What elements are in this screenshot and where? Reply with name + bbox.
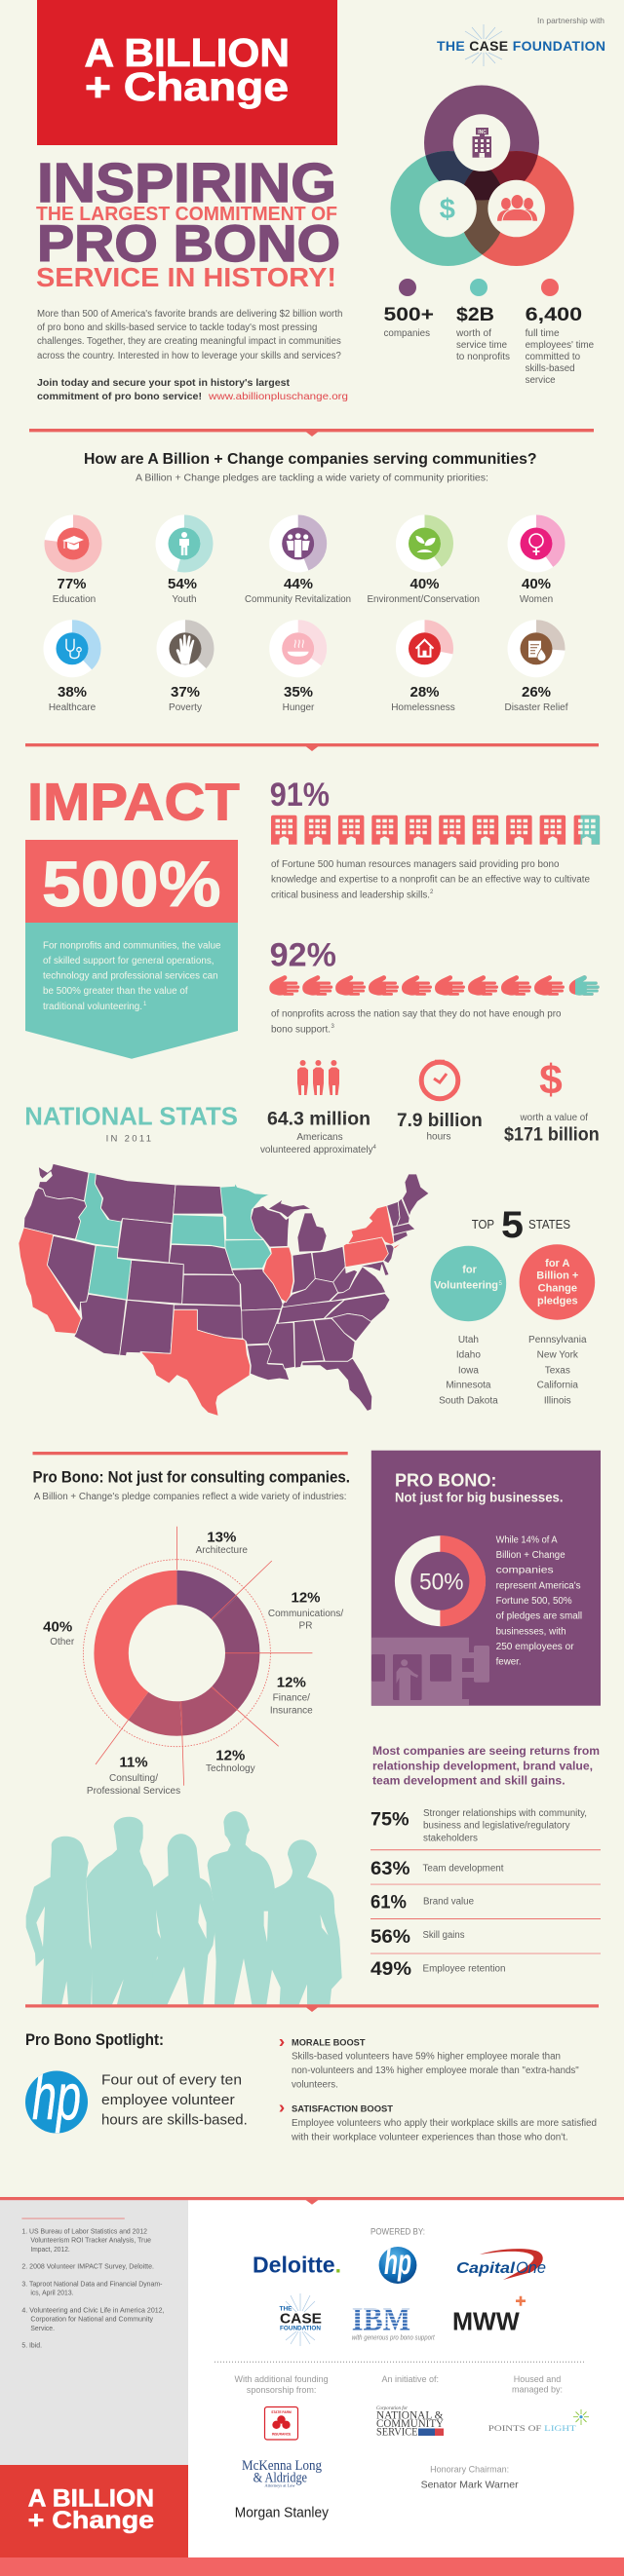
- label: Finance/Insurance 12%: Finance/: [273, 1693, 310, 1704]
- logo: footer A Billion + Change: + Change: [28, 2507, 154, 2534]
- text: morale boost: non-volunteers and 13% higher employee morale than "extra-hands": [292, 2065, 579, 2076]
- priority: Homelessness 28%: 28%: [410, 684, 440, 701]
- label: founding sponsorship: With additional founding: [235, 2374, 329, 2384]
- logo: State Farm: STATE FARM: [271, 2410, 292, 2414]
- logo: MWW: [452, 2296, 526, 2336]
- stat: 64.3 million Americans: [260, 1060, 376, 1155]
- priority: Disaster Relief 26%: 26%: [522, 684, 551, 701]
- stat: 92% of nonprofits: 3: [332, 1024, 335, 1030]
- stat: 6,400 full time employees: employees' time: [526, 340, 595, 351]
- logo: Corporation for National and Community Service: COMMUNITY: [376, 2418, 445, 2430]
- intro paragraph: of pro bono and skills-based service to tackle today's most pressing: [37, 322, 317, 333]
- logo: footer A Billion + Change: A BILLION: [28, 2485, 154, 2513]
- footnotes: ics, April 2013.: [30, 2289, 73, 2297]
- text: HP spotlight: Four out of every ten: [101, 2072, 242, 2088]
- text: small business stat: While 14% of A: [496, 1534, 558, 1545]
- heading: Pro Bono Spotlight: Pro Bono Spotlight:: [25, 2031, 164, 2049]
- text: honorary chairman: [421, 2464, 519, 2491]
- text: morale boost: [279, 2038, 579, 2090]
- text: small business stat: 250 employees or: [496, 1642, 574, 1652]
- logo: HP sphere: [378, 2247, 417, 2284]
- logo: Points of Light: [488, 2409, 589, 2433]
- top states: for volunteering: Idaho: [456, 1350, 481, 1361]
- heading: Top 5 states: [472, 1204, 570, 1246]
- pictogram: ten buildings: [271, 815, 600, 845]
- stat: 6,400 full time employees: full time: [526, 328, 560, 339]
- footnotes: 5. Ibid.: [21, 2341, 42, 2350]
- priority: Disaster Relief 26%: Disaster Relief: [504, 702, 568, 713]
- intro paragraph: across the country. Interested in how to leverage your skills and services?: [37, 351, 341, 361]
- heading: not just for consulting companies: A Billion + Change's pledge companies reflect a wide variety of industries:: [34, 1492, 346, 1502]
- logo: State Farm: INSURANCE: [272, 2432, 292, 2436]
- heading: Impact: IMPACT: [27, 774, 240, 832]
- intro paragraph: [37, 309, 342, 361]
- label: Architecture 13%: 13%: [207, 1530, 236, 1546]
- stat: $2B worth of service time: $2B: [456, 304, 494, 325]
- chart: 50% donut: [395, 1535, 486, 1626]
- stat: 7.9 billion hours: 7.9 billion: [397, 1110, 483, 1131]
- stat: 91% of HR managers: 2: [430, 890, 434, 895]
- label: Other 40%: [43, 1619, 75, 1648]
- logo: Points of Light: POINTS OF LIGHT: [488, 2423, 577, 2433]
- label: housed and managed by: Housed and: [514, 2374, 561, 2384]
- stat: 92% of nonprofits: 92%: [270, 937, 336, 974]
- top states: for volunteering: Volunteering: [434, 1280, 498, 1292]
- priority: Homelessness 28%: Homelessness: [391, 702, 455, 713]
- label: Finance/Insurance 12%: [270, 1674, 313, 1717]
- priority: Women 40%: Women: [520, 594, 553, 605]
- priority: Community Revitalization 44%: [245, 514, 351, 605]
- logo: IBM: [349, 2302, 436, 2342]
- stat: 75%: Stronger relationships with community,: [423, 1808, 587, 1819]
- priority: Environment/Conservation 40%: Environment/Conservation: [367, 594, 480, 605]
- top states: for pledges: for A: [545, 1258, 569, 1269]
- logo: McKenna Long & Aldridge: Attorneys at Law: [264, 2482, 295, 2487]
- heading: Top 5 states: 5: [501, 1204, 524, 1246]
- logo: A Billion + Change: A BILLION: [84, 30, 290, 75]
- logo: Capital One: [456, 2249, 546, 2280]
- logo: Capital One: Capital: [456, 2260, 516, 2277]
- heading: community priorities: How are A Billion + Change companies serving communities?: [84, 451, 537, 468]
- title: Inspiring the largest commitment of pro bono service in history: PRO BONO: [37, 215, 340, 273]
- label: founding sponsorship: sponsorship from:: [247, 2385, 316, 2395]
- text: honorary chairman: Honorary Chairman:: [430, 2464, 509, 2474]
- icon: storefront: [371, 1638, 489, 1706]
- text: small business stat: [496, 1534, 582, 1668]
- priority: Poverty 37%: 37%: [171, 684, 200, 701]
- stat: 75%: stakeholders: [423, 1833, 478, 1843]
- title: Inspiring the largest commitment of pro bono service in history: SERVICE IN HISTORY!: [36, 262, 336, 292]
- priority: Hunger 35%: 35%: [284, 684, 313, 701]
- priority: Education 77%: Education: [53, 594, 96, 605]
- top states: for pledges: Change: [538, 1283, 577, 1295]
- title: Inspiring the largest commitment of pro bono service in history: [36, 152, 340, 292]
- label: Architecture 13%: [196, 1530, 248, 1556]
- stat: 61%: Brand value: [423, 1897, 474, 1908]
- heading: returns: Most companies are seeing returns from: [372, 1746, 600, 1758]
- stat: 500+ companies: 500+: [384, 304, 434, 325]
- text: morale boost: volunteers.: [292, 2079, 338, 2090]
- pictogram: ten hands: [269, 975, 600, 996]
- label: Consulting/Professional Services 11%: Consulting/: [109, 1773, 158, 1784]
- stat: 75%: 75%: [370, 1809, 410, 1830]
- top states: for pledges: pledges: [537, 1296, 578, 1307]
- stat: 92% of nonprofits: [269, 937, 600, 1035]
- heading: not just for consulting companies: [33, 1468, 350, 1502]
- text: small business stat: Billion + Change: [496, 1550, 566, 1561]
- text: small business stat: Fortune 500, 50%: [496, 1596, 572, 1607]
- stat: $2B worth of service time: service time: [456, 340, 507, 351]
- top states: for pledges: California: [537, 1381, 578, 1391]
- stat: $2B worth of service time: to nonprofits: [456, 352, 510, 362]
- stat: 63%: Team development: [423, 1864, 504, 1875]
- top states: for pledges: Billion +: [536, 1270, 578, 1282]
- list: company returns: [370, 1808, 601, 1980]
- partner: The Case Foundation: THE CASE FOUNDATION: [437, 38, 605, 54]
- panel: 500% banner: traditional volunteering.: [43, 1002, 142, 1012]
- stat: 91% of HR managers: of Fortune 500 human resources managers said providing pro bono: [271, 859, 560, 870]
- footnotes: [21, 2218, 165, 2350]
- text: small business stat: companies: [496, 1566, 554, 1576]
- stat: 75%: business and legislative/regulatory: [423, 1821, 570, 1832]
- priority: Community Revitalization 44%: 44%: [284, 576, 313, 592]
- label: Finance/Insurance 12%: 12%: [277, 1674, 306, 1690]
- label: Finance/Insurance 12%: Insurance: [270, 1706, 313, 1717]
- footnotes: 4. Volunteering and Civic Life in America 2012,: [21, 2305, 165, 2314]
- logo: HP: [25, 2071, 88, 2134]
- call to action: [37, 378, 348, 402]
- footnotes: 2. 2008 Volunteer IMPACT Survey, Deloitte.: [21, 2262, 154, 2271]
- top states: for pledges: Texas: [545, 1365, 570, 1376]
- panel: 500% banner: For nonprofits and communities, the value: [43, 940, 221, 951]
- footnotes: 1. US Bureau of Labor Statistics and 2012: [21, 2226, 147, 2235]
- icon: company building: INC: [478, 130, 487, 135]
- top states: for volunteering: 5: [499, 1281, 503, 1287]
- heading: not just for consulting companies: Pro Bono: Not just for consulting companies.: [33, 1468, 350, 1486]
- text: satisfaction boost: SATISFACTION BOOST: [292, 2104, 393, 2115]
- stat: 64.3 million Americans: Americans: [296, 1132, 343, 1143]
- logo: McKenna Long & Aldridge: & Aldridge: [254, 2470, 307, 2485]
- priority: Hunger 35%: Hunger: [283, 702, 315, 713]
- label: Communications/PR 12%: [268, 1590, 343, 1632]
- priority: Education 77%: [45, 514, 101, 605]
- heading: National Stats in 2011: NATIONAL STATS: [24, 1101, 238, 1130]
- stat: 7.9 billion hours: [397, 1060, 483, 1143]
- stat: 6,400 full time employees: service: [526, 375, 556, 386]
- priority: Environment/Conservation 40%: [367, 514, 480, 605]
- logo: Corporation for National and Community Service: [376, 2406, 445, 2439]
- footnotes: Corporation for National and Community: [30, 2315, 153, 2324]
- heading: Top 5 states: STATES: [528, 1217, 570, 1231]
- label: Technology 12%: [206, 1748, 255, 1774]
- title: Inspiring the largest commitment of pro bono service in history: THE LARGEST COMMITMENT OF: [36, 204, 337, 225]
- stat: 6,400 full time employees: [526, 279, 595, 386]
- priority: Poverty 37%: Poverty: [169, 702, 202, 713]
- stat: worth $171 billion: [504, 1058, 600, 1146]
- footnotes: Impact, 2012.: [30, 2245, 70, 2254]
- logo: McKenna Long & Aldridge: McKenna Long: [242, 2458, 322, 2474]
- logo: Capital One: One: [516, 2258, 546, 2277]
- heading: returns: [372, 1746, 600, 1788]
- logo: A Billion + Change: [37, 0, 337, 145]
- logo: IBM: IBM: [352, 2302, 410, 2338]
- logo: HP: hp: [32, 2061, 81, 2134]
- priority: Disaster Relief 26%: [504, 620, 568, 713]
- chart: industries donut: [43, 1527, 343, 1797]
- label: Consulting/Professional Services 11%: [87, 1755, 180, 1797]
- partner: The Case Foundation: In partnership with: [537, 16, 604, 25]
- stat: 500+ companies: [384, 279, 434, 339]
- logo: McKenna Long & Aldridge: [242, 2458, 322, 2487]
- top states: for pledges: New York: [537, 1350, 579, 1361]
- icon: dollar sign: $: [440, 194, 455, 225]
- stat: 63%: 63%: [370, 1859, 410, 1879]
- stat: 6,400 full time employees: committed to: [526, 352, 581, 362]
- logo: State Farm: [265, 2406, 298, 2440]
- priority: Women 40%: 40%: [522, 576, 551, 592]
- priority: Education 77%: 77%: [57, 576, 87, 592]
- text: small business stat: of pledges are small: [496, 1611, 582, 1622]
- panel: 500% banner: [25, 840, 238, 1059]
- footnotes: Service.: [30, 2324, 55, 2332]
- label: powered by: POWERED BY:: [370, 2227, 425, 2237]
- top states: for volunteering: Utah: [458, 1335, 479, 1345]
- stat: 64.3 million Americans: 64.3 million: [267, 1110, 370, 1130]
- stat: 56%: Skill gains: [423, 1930, 464, 1941]
- stat: 49%: Employee retention: [423, 1964, 505, 1975]
- stat: 6,400 full time employees: 6,400: [526, 304, 582, 325]
- stat: worth $171 billion: worth a value of: [520, 1113, 588, 1123]
- top states: for volunteering: Minnesota: [446, 1381, 491, 1391]
- label: Communications/PR 12%: Communications/: [268, 1609, 343, 1619]
- priority: Youth 54%: [156, 514, 213, 605]
- heading: returns: relationship development, brand value,: [372, 1762, 593, 1773]
- heading: National Stats in 2011: IN 2011: [106, 1133, 151, 1144]
- title: Inspiring the largest commitment of pro bono service in history: INSPIRING: [37, 152, 336, 214]
- label: Other 40%: 40%: [43, 1619, 72, 1636]
- stat: 64.3 million Americans: volunteered approximately: [260, 1145, 372, 1155]
- text: small business stat: businesses, with: [496, 1626, 566, 1637]
- illustration: group of people silhouettes: [26, 1811, 342, 2004]
- stat: worth $171 billion: $171 billion: [504, 1124, 600, 1146]
- logo: Corporation for National and Community Service: SERVICE: [376, 2427, 417, 2439]
- text: small business stat: fewer.: [496, 1657, 522, 1668]
- label: Communications/PR 12%: PR: [299, 1621, 312, 1632]
- logo: HP sphere: hp: [384, 2242, 411, 2282]
- label: Architecture 13%: Architecture: [196, 1545, 248, 1556]
- stat: 7.9 billion hours: hours: [426, 1132, 451, 1143]
- venn diagram: [390, 86, 574, 266]
- icon: employees: [497, 195, 537, 221]
- priority: Healthcare 38%: [43, 620, 101, 713]
- text: morale boost: Skills-based volunteers have 59% higher employee morale than: [292, 2052, 561, 2063]
- logo: The Case Foundation: CASE: [280, 2312, 322, 2328]
- stat: 91% of HR managers: 91%: [270, 777, 330, 814]
- logo: Corporation for National and Community Service: Corporation for: [376, 2406, 408, 2411]
- text: HP spotlight: hours are skills-based.: [101, 2113, 248, 2129]
- text: satisfaction boost: with their workplace volunteer experiences than those who don't.: [291, 2132, 568, 2142]
- logo: footer A Billion + Change: [0, 2465, 188, 2557]
- logo: The Case Foundation: [279, 2293, 322, 2346]
- stat: $2B worth of service time: worth of: [455, 328, 491, 339]
- icon: company building: [472, 128, 491, 158]
- logo: Morgan Stanley: Morgan Stanley: [235, 2505, 330, 2520]
- stat: worth $171 billion: $: [539, 1058, 563, 1104]
- panel: not just for big businesses: Not just for big businesses.: [395, 1489, 564, 1504]
- priority: Hunger 35%: [269, 620, 327, 713]
- panel: 500% banner: be 500% greater than the value of: [43, 986, 188, 997]
- label: Consulting/Professional Services 11%: 11%: [119, 1755, 148, 1771]
- label: founding sponsorship: [235, 2374, 329, 2395]
- stat: $2B worth of service time: [455, 279, 510, 362]
- text: morale boost: MORALE BOOST: [292, 2038, 366, 2049]
- call to action: Join today and secure your spot in history's largest: [37, 378, 291, 389]
- stat: 6,400 full time employees: skills-based: [526, 363, 575, 374]
- stat: 49%: [370, 1959, 505, 1980]
- text: satisfaction boost: [279, 2104, 597, 2142]
- call to action: www.abillionpluschange.org: [208, 391, 348, 402]
- panel: 500% banner: 1: [143, 1002, 147, 1007]
- stat: 61%: 61%: [370, 1893, 407, 1913]
- panel: 500% banner: technology and professional services can: [43, 971, 218, 982]
- intro paragraph: More than 500 of America's favorite brands are delivering $2 billion worth: [37, 309, 342, 320]
- label: Other 40%: Other: [50, 1637, 75, 1648]
- priority: Women 40%: [507, 514, 566, 605]
- text: HP spotlight: [101, 2072, 248, 2129]
- panel: 500% banner: 500%: [42, 848, 220, 920]
- label: Technology 12%: Technology: [206, 1763, 255, 1774]
- stat: 56%: [370, 1927, 464, 1948]
- stat: 61%: [370, 1893, 474, 1913]
- top states: for pledges: [520, 1244, 595, 1406]
- stat: 92% of nonprofits: of nonprofits across the nation say that they do not have enough pro: [271, 1009, 562, 1020]
- panel: not just for big businesses: PRO BONO:: [395, 1471, 496, 1491]
- priority: Environment/Conservation 40%: 40%: [410, 576, 440, 592]
- priority: Healthcare 38%: 38%: [58, 684, 87, 701]
- stat: 91% of HR managers: [270, 777, 600, 900]
- text: small business stat: represent America's: [496, 1580, 581, 1591]
- intro paragraph: challenges. Together, they are creating meaningful impact in communities: [37, 336, 341, 347]
- heading: Top 5 states: TOP: [472, 1217, 494, 1231]
- panel: 500% banner: of skilled support for general operations,: [43, 956, 214, 966]
- stat: 49%: 49%: [370, 1959, 411, 1980]
- stat: 91% of HR managers: knowledge and expertise to a nonprofit can be an effective way to cultivate: [271, 875, 590, 886]
- stat: 63%: [370, 1859, 504, 1879]
- priority: Community Revitalization 44%: Community Revitalization: [245, 594, 351, 605]
- label: an initiative of: An initiative of:: [382, 2374, 439, 2384]
- priority: Healthcare 38%: Healthcare: [49, 702, 97, 713]
- logo: Deloitte: Deloitte.: [253, 2253, 341, 2278]
- call to action: commitment of pro bono service!: [37, 392, 202, 402]
- label: Communications/PR 12%: 12%: [291, 1590, 321, 1607]
- logo: A Billion + Change: + Change: [85, 64, 289, 109]
- logo: The Case Foundation: THE: [279, 2306, 292, 2313]
- panel: not just for big businesses: [371, 1451, 601, 1706]
- chart: 50% donut: 50%: [419, 1569, 464, 1595]
- stat: 500+ companies: companies: [384, 328, 430, 339]
- logo: IBM: with generous pro bono support: [352, 2335, 436, 2342]
- top states: for pledges: Pennsylvania: [528, 1335, 587, 1345]
- priority: Youth 54%: Youth: [172, 594, 197, 605]
- heading: community priorities: [84, 451, 537, 484]
- stat: 56%: 56%: [370, 1927, 410, 1948]
- text: honorary chairman: Senator Mark Warner: [421, 2480, 519, 2491]
- text: satisfaction boost: Employee volunteers who apply their workplace skills are more satisfied: [292, 2118, 597, 2129]
- stat: 92% of nonprofits: bono support.: [271, 1024, 331, 1035]
- top states: for volunteering: for: [462, 1265, 478, 1276]
- footer backgrounds: [0, 2197, 624, 2576]
- top states: for pledges: Illinois: [544, 1395, 571, 1406]
- heading: National Stats in 2011: [24, 1101, 238, 1144]
- stat: 91% of HR managers: critical business and leadership skills.: [271, 890, 430, 900]
- logo: MWW: MWW: [452, 2309, 521, 2336]
- priority: Youth 54%: 54%: [168, 576, 197, 592]
- priority: Homelessness 28%: [391, 620, 455, 713]
- stat: 75%: [370, 1808, 587, 1843]
- label: Consulting/Professional Services 11%: Professional Services: [87, 1786, 180, 1797]
- heading: returns: team development and skill gains.: [372, 1776, 566, 1788]
- top states: for volunteering: Iowa: [458, 1365, 479, 1376]
- label: housed and managed by: [512, 2374, 563, 2394]
- label: housed and managed by: managed by:: [512, 2384, 563, 2394]
- top states: for volunteering: [431, 1246, 506, 1406]
- top states: for volunteering: South Dakota: [439, 1395, 498, 1406]
- footnotes: 3. Taproot National Data and Financial Dynam-: [21, 2280, 163, 2289]
- logo: Corporation for National and Community Service: NATIONAL &: [376, 2409, 444, 2421]
- heading: community priorities: A Billion + Change pledges are tackling a wide variety of community priorities:: [136, 474, 488, 484]
- text: HP spotlight: employee volunteer: [101, 2093, 235, 2108]
- partner: The Case Foundation: [437, 16, 605, 66]
- stat: 64.3 million Americans: 4: [372, 1145, 376, 1151]
- priority: Poverty 37%: [156, 620, 214, 713]
- footnotes: Volunteerism ROI Tracker Analysis, True: [30, 2236, 151, 2245]
- label: Technology 12%: 12%: [215, 1748, 245, 1764]
- logo: The Case Foundation: FOUNDATION: [280, 2325, 321, 2332]
- map: United States: [19, 1163, 429, 1416]
